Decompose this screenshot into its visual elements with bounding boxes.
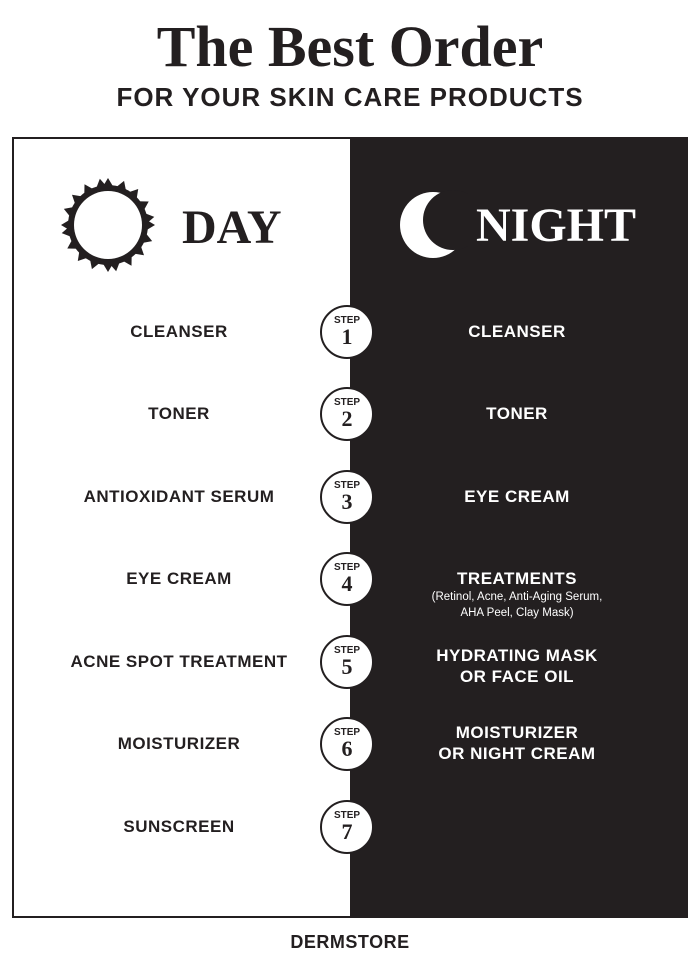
text: STEP xyxy=(334,810,360,821)
text: STEP xyxy=(334,480,360,491)
icon: sun xyxy=(61,178,155,272)
icon: moon xyxy=(400,192,455,258)
footer logo: DERMSTORE xyxy=(290,932,410,952)
text: STEP xyxy=(334,727,360,738)
step circles: 1 xyxy=(342,324,352,349)
text: MOISTURIZER xyxy=(118,734,240,753)
heading: DAY: DAY xyxy=(182,201,282,254)
text: STEP xyxy=(334,645,360,656)
text: TONER xyxy=(486,404,548,423)
text: EYE CREAM xyxy=(464,487,570,506)
text: 3 xyxy=(342,489,352,514)
text: 4 xyxy=(342,571,352,596)
text: ANTIOXIDANT SERUM xyxy=(84,487,274,506)
text: 5 xyxy=(342,654,352,679)
night step 4: treatments: TREATMENTS xyxy=(457,569,577,588)
text: OR FACE OIL xyxy=(460,667,574,686)
night step 4: treatments: AHA Peel, Clay Mask) xyxy=(460,607,574,619)
text: STEP xyxy=(334,397,360,408)
night steps: CLEANSER xyxy=(468,322,566,341)
day steps: CLEANSER xyxy=(130,322,228,341)
step circles: STEP xyxy=(334,315,360,326)
night step 4: treatments: (Retinol, Acne, Anti-Aging Serum, xyxy=(432,591,602,603)
text: SUNSCREEN xyxy=(123,817,235,836)
heading: NIGHT: NIGHT xyxy=(476,199,636,252)
text: 6 xyxy=(342,736,352,761)
subtitle: FOR YOUR SKIN CARE PRODUCTS xyxy=(116,82,584,112)
panel: night background xyxy=(350,139,688,916)
text: STEP xyxy=(334,562,360,573)
step circles xyxy=(320,305,374,359)
text: 2 xyxy=(342,406,352,431)
text: EYE CREAM xyxy=(126,569,232,588)
title: The Best Order xyxy=(157,14,543,79)
night step 4: treatments xyxy=(432,569,602,619)
text: HYDRATING MASK xyxy=(436,646,598,665)
text: 7 xyxy=(342,819,352,844)
text: MOISTURIZER xyxy=(456,723,578,742)
text: ACNE SPOT TREATMENT xyxy=(71,652,287,671)
text: OR NIGHT CREAM xyxy=(438,744,596,763)
panel: main frame xyxy=(12,137,688,918)
text: TONER xyxy=(148,404,210,423)
